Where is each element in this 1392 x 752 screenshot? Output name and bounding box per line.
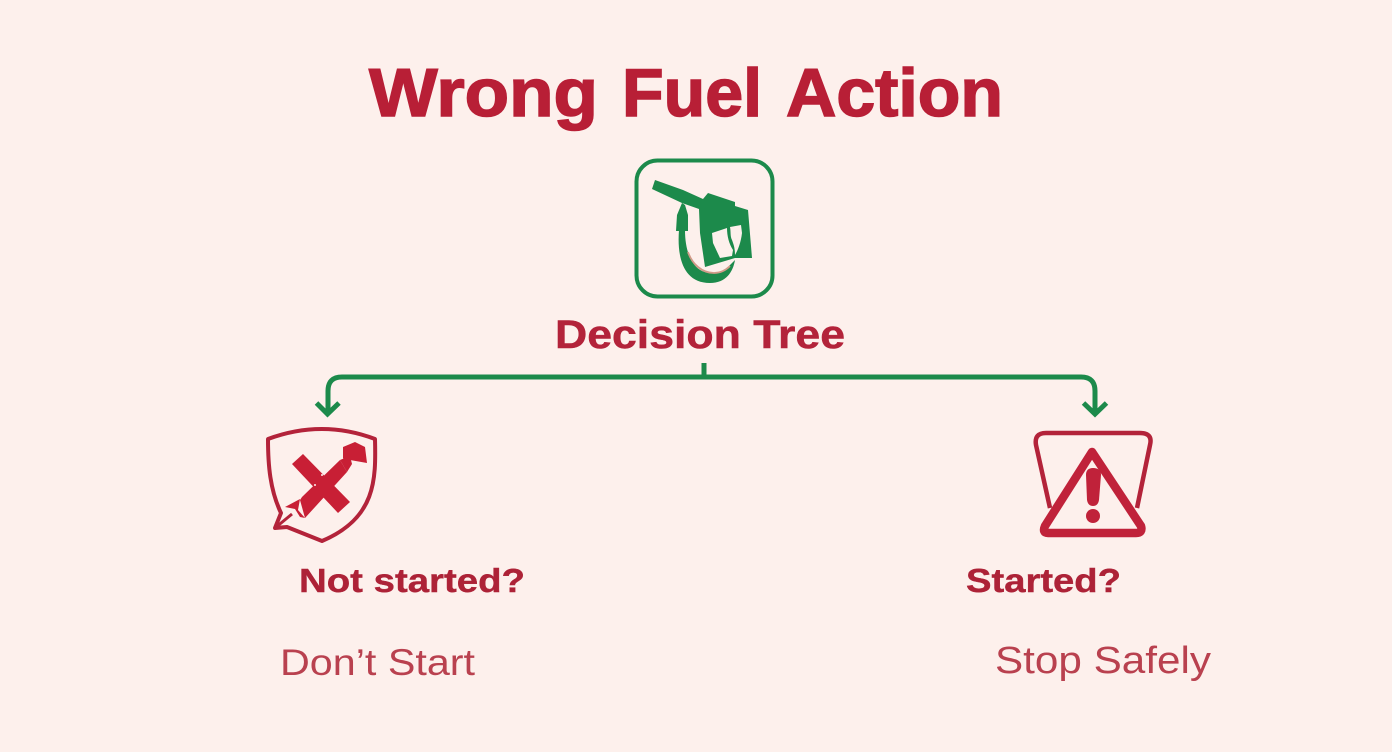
action: stop safely: Stop Safely xyxy=(995,640,1211,682)
icon: shield with crossed nozzle xyxy=(268,429,375,541)
title: Wrong xyxy=(369,55,598,131)
label: started: Started? xyxy=(966,562,1121,599)
heading: decision tree: Decision Tree xyxy=(555,313,845,357)
title xyxy=(369,55,1003,131)
branching arrows xyxy=(316,363,1106,414)
icon: fuel nozzle xyxy=(636,160,772,296)
title: Fuel xyxy=(622,55,762,131)
icon: warning triangle xyxy=(1036,433,1151,533)
label: not started: Not started? xyxy=(299,562,525,599)
action: don't start: Don’t Start xyxy=(280,642,476,683)
title: Action xyxy=(786,55,1003,131)
